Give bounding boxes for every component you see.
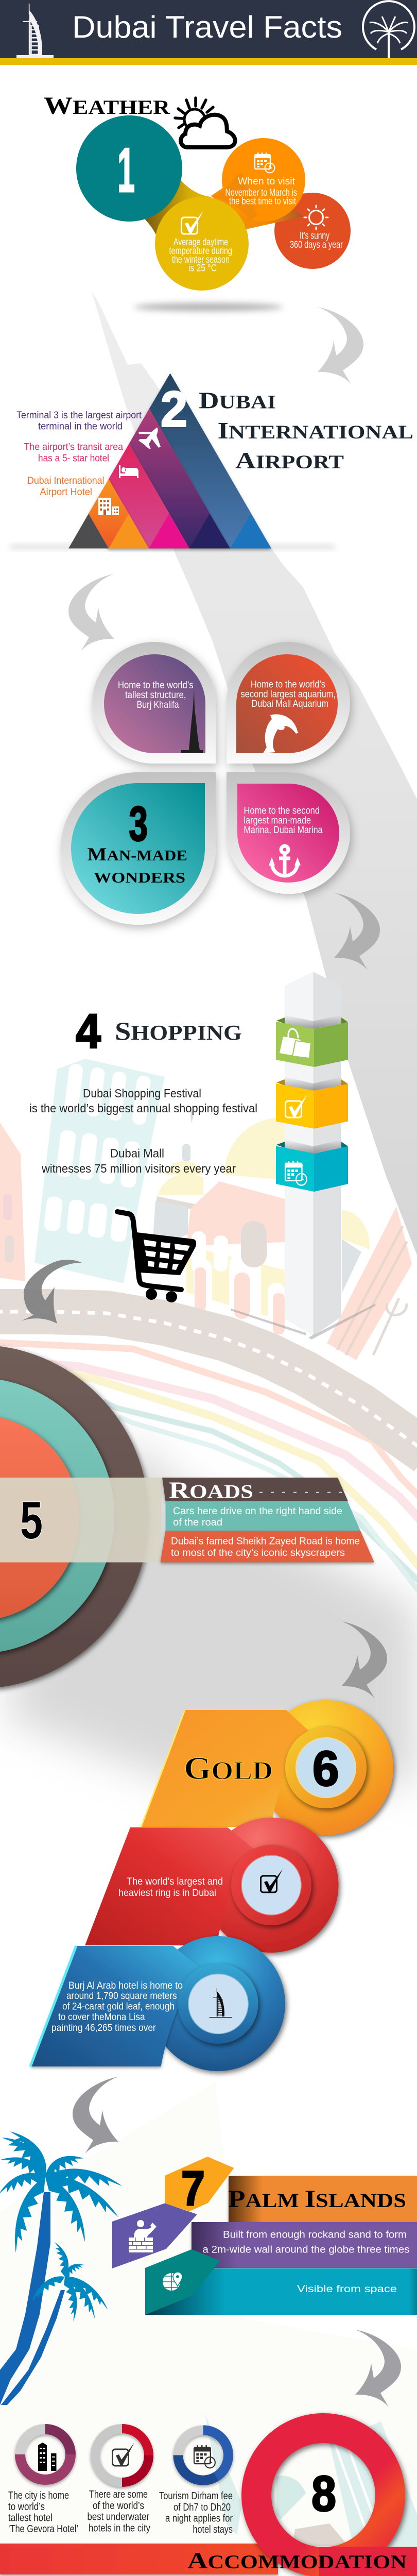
text: when to visit: When to visit bbox=[238, 176, 296, 187]
text: sunny: It’s sunny bbox=[300, 231, 329, 241]
band: green shopping bags bbox=[276, 1015, 348, 1067]
ribbon: Sheikh Zayed Road bbox=[161, 1531, 374, 1562]
heading: gold: GOLD bbox=[184, 1751, 273, 1786]
icon: plane bbox=[138, 428, 161, 449]
text: shopping festival: is the world’s biggest annual shopping festival bbox=[29, 1101, 257, 1115]
disc: Burj Al Arab fact bbox=[30, 1936, 285, 2071]
text: tourism dirham: of Dh7 to Dh20 bbox=[173, 2502, 231, 2513]
icon: calendar bbox=[194, 2445, 215, 2468]
arrow bbox=[341, 1621, 387, 1699]
band: heading bbox=[229, 2176, 417, 2222]
text: tallest hotel bbox=[8, 2490, 78, 2535]
orange connector overlay bbox=[211, 173, 257, 229]
section 7: palm islands bbox=[0, 2077, 417, 2405]
band: teal calendar bbox=[276, 1140, 348, 1192]
text: tallest hotel: The city is home bbox=[8, 2490, 69, 2501]
text: underwater hotels bbox=[88, 2489, 150, 2534]
ribbon: Sheikh Zayed Road: Dubai’s famed Sheikh Zayed Road is home bbox=[171, 1536, 360, 1547]
icon: check bbox=[112, 2443, 134, 2466]
section 2: airport bbox=[10, 303, 413, 549]
column with arrow top bbox=[231, 972, 376, 1340]
icon: bed bbox=[119, 465, 138, 478]
icon: Burj Al Arab bbox=[16, 4, 54, 58]
arrow bbox=[21, 1260, 82, 1324]
number 4: 4 bbox=[76, 1004, 101, 1058]
text: tallest hotel: to world’s bbox=[8, 2501, 45, 2513]
number 3: 3 bbox=[129, 796, 148, 851]
heading: PALM ISLANDS bbox=[228, 2185, 406, 2213]
bar: left bbox=[0, 2544, 278, 2574]
icon: shopping cart bbox=[117, 1212, 196, 1302]
icon: check bbox=[260, 1869, 283, 1892]
donut: tourism dirham bbox=[178, 2430, 228, 2480]
concentric circles bbox=[0, 1345, 149, 1689]
heading: Dubai International Airport: AIRPORT bbox=[235, 447, 344, 473]
number 2: 2 bbox=[161, 381, 187, 437]
text: tallest hotel: ‘The Gevora Hotel’ bbox=[8, 2523, 78, 2535]
text: wall fact bbox=[203, 2230, 410, 2256]
circle: sunny days bbox=[274, 193, 351, 269]
icon: dolphin bbox=[263, 714, 299, 753]
heading: weather: WEATHER bbox=[44, 92, 170, 120]
background: curved road and rainbow stripes bbox=[0, 1312, 417, 1602]
text: Home to the world’s bbox=[251, 679, 325, 690]
title: Dubai Travel Facts bbox=[72, 10, 342, 44]
text: The world’s largest and bbox=[127, 1876, 223, 1887]
text: temperature: is 25 °C bbox=[188, 263, 217, 274]
text: tallest hotel: tallest hotel bbox=[8, 2512, 53, 2523]
circle: yellow temperature bbox=[155, 197, 249, 291]
illustration: palm trees bbox=[0, 2125, 124, 2405]
petal: aquarium bbox=[227, 642, 350, 764]
text bbox=[118, 1876, 223, 1899]
text: temperature: Average daytime bbox=[173, 237, 228, 248]
text: terminal 3: Terminal 3 is the largest airport bbox=[16, 410, 142, 421]
section 6: gold bbox=[30, 1621, 393, 2071]
petal: number 3 heading bbox=[61, 772, 216, 925]
background: off-white lower wash bbox=[0, 2082, 417, 2576]
icon: Burj Khalifa bbox=[181, 689, 203, 753]
text: underwater hotels: There are some bbox=[89, 2489, 148, 2500]
icon: anchor bbox=[269, 846, 301, 876]
text: when to visit: November to March is bbox=[225, 188, 297, 198]
text: Dubai Mall Aquarium bbox=[251, 699, 328, 709]
band behind number bbox=[0, 1478, 162, 1562]
ring: number 8 bbox=[256, 2428, 390, 2562]
ribbon: right hand side: of the road bbox=[173, 1517, 222, 1528]
text: painting 46,265 times over bbox=[51, 2023, 156, 2033]
heading: Dubai International Airport: DUBAI bbox=[199, 387, 276, 413]
ribbon: roads heading: ROADS bbox=[169, 1477, 253, 1503]
text: underwater hotels: of the world’s bbox=[93, 2500, 144, 2512]
disc: ring fact bbox=[85, 1818, 339, 1953]
text: airport hotel: Airport Hotel bbox=[40, 487, 92, 498]
text: temperature: temperature during bbox=[169, 246, 232, 257]
text: airport hotel bbox=[27, 476, 104, 498]
text: largest man-made bbox=[244, 815, 311, 826]
section 1: weather bbox=[44, 92, 351, 291]
icon: check bbox=[285, 1094, 307, 1117]
heading bbox=[88, 844, 187, 886]
circle: teal number bbox=[76, 115, 182, 222]
band: wall fact bbox=[192, 2222, 417, 2268]
text: wall fact: a 2m-wide wall around the globe three times bbox=[203, 2244, 410, 2256]
text: tourism dirham bbox=[159, 2490, 233, 2535]
icon: skyscraper bbox=[38, 2443, 57, 2471]
icon: sun bbox=[304, 206, 328, 229]
text: tourism dirham: Tourism Dirham fee bbox=[159, 2490, 233, 2502]
heading: MAN-MADE bbox=[88, 844, 187, 865]
text: transit hotel: The airport’s transit area bbox=[24, 442, 123, 452]
heading: Dubai International Airport: INTERNATIONAL bbox=[217, 417, 413, 444]
text: terminal 3: terminal in the world bbox=[38, 421, 123, 432]
connector: teal to yellow bbox=[145, 180, 227, 245]
text: temperature bbox=[169, 237, 232, 274]
band: visible from space bbox=[145, 2268, 417, 2315]
arrow bbox=[73, 2077, 118, 2154]
shadow under weather bbox=[134, 303, 283, 311]
text: tallest structure, bbox=[125, 690, 186, 701]
ribbon: roads heading bbox=[162, 1477, 348, 1503]
text: second largest aquarium, bbox=[241, 689, 336, 700]
heading: WONDERS bbox=[94, 870, 185, 886]
text: of 24-carat gold leaf, enough bbox=[62, 2002, 175, 2012]
text: heaviest ring is in Dubai bbox=[118, 1888, 216, 1899]
icon: sun and cloud bbox=[175, 98, 235, 147]
section 3: man-made wonders bbox=[61, 574, 350, 925]
text: Home to the world’s bbox=[118, 680, 194, 691]
ribbon: right hand side: Cars here drive on the right hand side bbox=[173, 1506, 342, 1517]
text: Marina, Dubai Marina bbox=[244, 825, 323, 836]
band: yellow check bbox=[276, 1077, 348, 1129]
text: Dubai Mall bbox=[41, 1147, 236, 1175]
text: wall fact: Built from enough rockand sand to form bbox=[223, 2230, 407, 2240]
bar: right bbox=[319, 2547, 417, 2576]
background: faded Burj Khalifa tower bbox=[92, 291, 417, 1255]
number 1: 1 bbox=[117, 135, 135, 205]
icon: globe with pin bbox=[163, 2272, 182, 2291]
arrow bbox=[334, 893, 380, 970]
text: sunny bbox=[290, 231, 343, 250]
connector: orange to yellow bbox=[211, 175, 304, 229]
header bar bbox=[0, 0, 417, 65]
text bbox=[118, 680, 194, 710]
text: Burj Al Arab hotel is home to bbox=[68, 1980, 183, 1991]
text: Burj Khalifa bbox=[137, 700, 179, 710]
number 5: 5 bbox=[20, 1491, 43, 1550]
heading: SHOPPING bbox=[115, 1016, 242, 1045]
petal: tallest structure bbox=[92, 642, 216, 764]
donut: tallest hotel bbox=[20, 2429, 71, 2480]
section 8: accommodation bbox=[0, 2330, 417, 2576]
text: around 1,790 square meters bbox=[66, 1991, 177, 2002]
text: tourism dirham: a night applies for bbox=[165, 2513, 233, 2524]
petal: marina bbox=[227, 772, 350, 894]
ribbon: Sheikh Zayed Road: to most of the city’s iconic skyscrapers bbox=[171, 1548, 345, 1558]
icon: calendar bbox=[255, 152, 275, 173]
text: terminal 3 bbox=[16, 410, 142, 432]
text: Dubai Mall: witnesses 75 million visitors every year bbox=[41, 1162, 236, 1175]
text: visible from space: Visible from space bbox=[297, 2284, 397, 2295]
section 5: roads bbox=[0, 1260, 374, 1689]
heading: Dubai International Airport bbox=[199, 387, 413, 473]
icon: check bbox=[181, 211, 203, 234]
icon: bags bbox=[280, 1029, 311, 1058]
hexagon: number 7 bbox=[165, 2157, 234, 2211]
text: to cover theMona Lisa bbox=[58, 2012, 145, 2023]
icon: calendar bbox=[285, 1161, 307, 1185]
ribbon: right hand side bbox=[166, 1501, 360, 1531]
number 7: 7 bbox=[181, 2161, 205, 2216]
icon: builder with bricks bbox=[129, 2220, 157, 2252]
text: Dubai Mall: Dubai Mall bbox=[110, 1147, 164, 1160]
text: Home to the second bbox=[244, 806, 320, 816]
text: underwater hotels: best underwater bbox=[88, 2511, 149, 2522]
text: when to visit bbox=[225, 176, 297, 207]
background: second city street scene bbox=[0, 2414, 417, 2576]
arrow bbox=[68, 574, 114, 651]
text bbox=[241, 679, 336, 709]
text: shopping festival bbox=[29, 1087, 257, 1115]
text bbox=[244, 806, 323, 836]
heading: ACCOMMODATION bbox=[187, 2547, 407, 2573]
triangle graphic bbox=[68, 373, 271, 548]
text: sunny: 360 days a year bbox=[290, 240, 343, 250]
text: transit hotel: has a 5- star hotel bbox=[38, 453, 109, 464]
triangle base shadow bbox=[10, 545, 335, 549]
text: tourism dirham: hotel stays bbox=[193, 2524, 233, 2535]
connector: red to orange bbox=[281, 193, 329, 242]
text bbox=[51, 1980, 183, 2033]
text: temperature: the winter season bbox=[172, 255, 230, 265]
text: airport hotel: Dubai International bbox=[27, 476, 104, 486]
hexagon: builder bbox=[112, 2203, 197, 2268]
donut: underwater hotels bbox=[95, 2429, 149, 2482]
text: transit hotel bbox=[24, 442, 123, 464]
background: first city street scene bbox=[0, 1059, 412, 1360]
background: long grey shadow of roads circle bbox=[0, 1437, 417, 1793]
section 4: shopping bbox=[29, 893, 380, 1340]
icon: Burj Al Arab bbox=[209, 1988, 232, 2018]
icon: palm island circle bbox=[363, 1, 414, 58]
text: shopping festival: Dubai Shopping Festival bbox=[83, 1087, 201, 1100]
disc: gold bbox=[141, 1700, 393, 1835]
arrow bbox=[355, 2330, 401, 2407]
circle: when to visit bbox=[222, 138, 305, 222]
text: when to visit: the best time to visit bbox=[229, 196, 297, 207]
icon: hotel building bbox=[98, 498, 119, 515]
number 6: 6 bbox=[312, 1741, 339, 1796]
hexagon: globe bbox=[145, 2249, 220, 2315]
number 8: 8 bbox=[311, 2466, 336, 2521]
arrow bbox=[318, 307, 363, 384]
text: underwater hotels: hotels in the city bbox=[89, 2522, 150, 2534]
